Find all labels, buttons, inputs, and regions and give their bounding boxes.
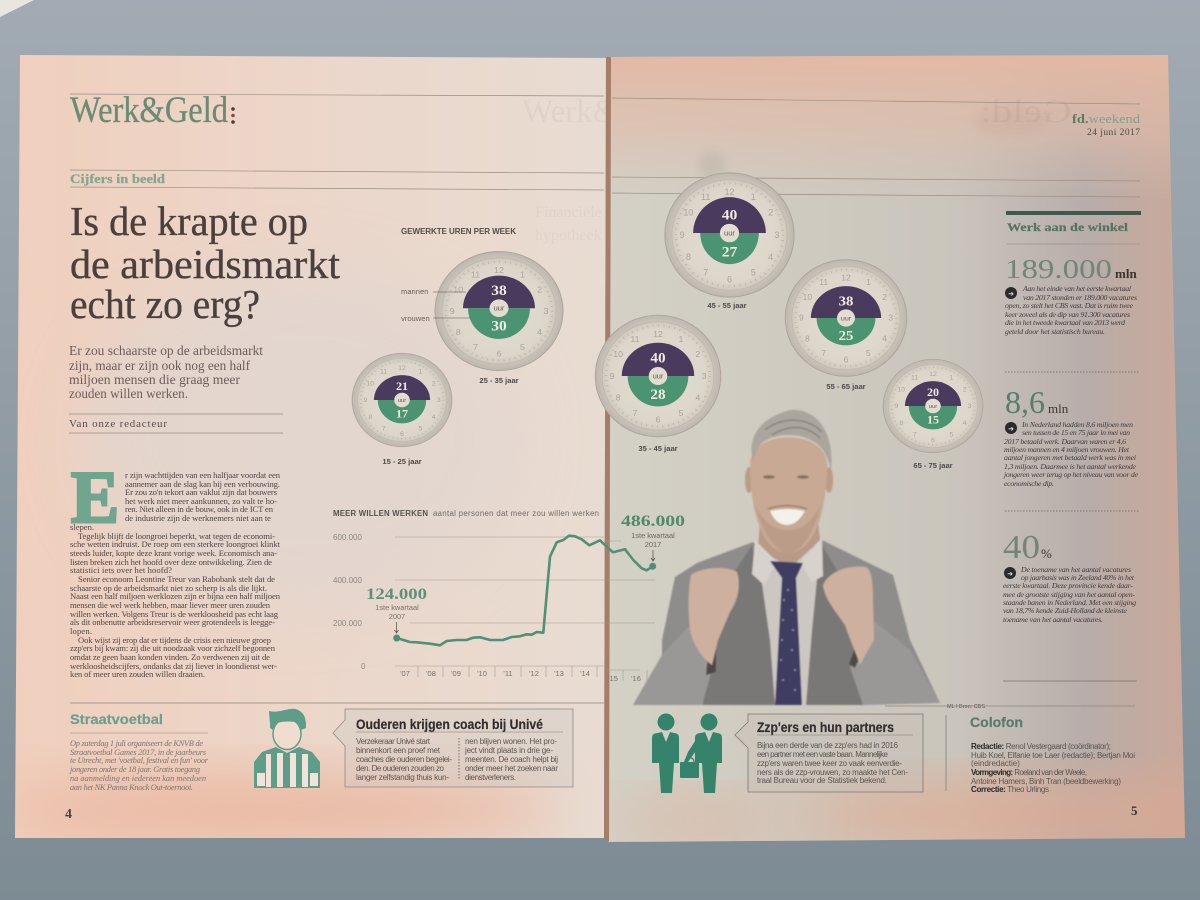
clock: 55-65 jaar: 38	[839, 294, 853, 309]
clock: 65-75 jaar: 5	[949, 432, 954, 439]
clock: 55-65 jaar: 2	[882, 292, 887, 302]
chart y-axis labels: 400.000	[333, 576, 362, 585]
clock: 15-25 jaar: 6	[400, 431, 404, 438]
section label: Cijfers in beeld	[70, 171, 166, 186]
stat text: Aan het einde van het eerste kwartaal	[1022, 284, 1131, 293]
stat: 40%: ➜	[1007, 571, 1013, 578]
clock: 45-55 jaar: 12	[724, 187, 735, 197]
panel: Straatvoetbal: Straatvoetbal Games 2017, in de jaarbeurs	[70, 748, 206, 757]
article text: de industrie zijn de werknemers niet aan te	[125, 513, 271, 523]
label: 55-65 jaar: 55 - 65 jaar	[826, 382, 866, 391]
article text: statistici iets over het hoofd?	[70, 565, 172, 575]
clock: 15-25 jaar: 5	[418, 426, 423, 433]
clock: 25-35 jaar: 2	[537, 285, 542, 294]
article text: slepen.	[70, 522, 94, 532]
panel: Colofon	[970, 715, 1135, 794]
callout box: Zzp'ers en hun partners: een partner met een vaste baan. Mannelijke	[757, 750, 889, 759]
article text: omdat ze geen baan konden vinden. Zo verdwenen zij uit de	[70, 652, 270, 662]
stat text: sen tussen de 15 en 75 jaar in mei van	[1022, 428, 1130, 437]
panel: Straatvoetbal: Op zaterdag 1 juli organiseert de KNVB de	[70, 739, 203, 748]
intro text	[69, 344, 263, 402]
chart x-axis labels: '15	[608, 674, 618, 683]
clock: 65-75 jaar: 2	[963, 387, 967, 393]
date block: 24 juni 2017	[1087, 128, 1140, 138]
clock: 15-25 jaar: 21	[396, 380, 408, 393]
clock: 65-75 jaar: 6	[931, 437, 935, 444]
clock: 45-55 jaar: 8	[686, 252, 691, 262]
callout box: Zzp'ers en hun partners: traal Bureau voor de Statistiek bekend.	[757, 776, 887, 785]
panel: Straatvoetbal: jongeren onder de 18 jaar. Gratis toegang	[69, 765, 200, 774]
chart x-axis labels	[400, 669, 660, 683]
callout box: Ouderen krijgen coach bij Univé: meenten. De coach helpt bij	[465, 755, 558, 764]
clock: 55-65 jaar	[785, 260, 907, 376]
shirt	[757, 548, 820, 705]
clock: 25-35 jaar: 8	[456, 327, 461, 337]
eyes	[763, 475, 775, 479]
clock: 55-65 jaar: 3	[888, 313, 893, 323]
chart x-axis labels: '07	[400, 669, 410, 678]
clock: 65-75 jaar: 8	[899, 420, 903, 427]
stat text: open, zo stelt het CBS vast. Dat is ruim twee	[1005, 301, 1134, 310]
clock: 25-35 jaar: 10	[453, 285, 463, 294]
label: 25-35 jaar: 25 - 35 jaar	[479, 376, 519, 385]
masthead: Werk & Geld: Werk&Geld	[70, 90, 228, 131]
chart title: aantal personen dat meer zou willen werken	[433, 509, 599, 518]
stat text: geteld door het statistisch bureau.	[1005, 327, 1105, 336]
article text: r zijn wachttijden van een halfjaar voordat een	[125, 470, 281, 480]
clock: 45-55 jaar: 40	[722, 207, 738, 223]
callout box: Zzp'ers en hun partners: Zzp'ers en hun partners	[757, 719, 894, 735]
icon: referee	[254, 709, 320, 788]
intro text: zijn, maar er zijn ook nog een half	[69, 359, 250, 374]
clock: 35-45 jaar: 2	[695, 349, 701, 359]
clock: 25-35 jaar: 38	[491, 284, 507, 299]
callout: 486.000: 2017	[645, 540, 661, 549]
paper corner top left	[0, 0, 34, 17]
chart x-axis labels: '13	[554, 669, 564, 678]
clock: 25-35 jaar: 6	[496, 349, 502, 358]
clock: 15-25 jaar: 1	[418, 369, 423, 376]
show-through ghost text: Financiële	[535, 204, 602, 221]
callout box: Ouderen krijgen coach bij Univé: onder meer het zoeken naar	[465, 764, 558, 773]
clock: 45-55 jaar: 3	[774, 230, 780, 240]
callout: 486.000: 1ste kwartaal	[631, 531, 675, 540]
chart title: MEER WILLEN WERKEN	[333, 509, 428, 518]
stat: 189.000 mln	[1005, 254, 1137, 299]
panel: Colofon: Vormgeving: Roeland van der Weele,	[971, 768, 1087, 777]
photo: smiling businessman	[633, 410, 940, 705]
suit	[633, 540, 940, 705]
article text: schaarste op de arbeidsmarkt niet zo scherp is als die lijkt.	[70, 583, 267, 593]
callout box: Zzp'ers en hun partners	[735, 714, 923, 792]
panel: Colofon: Antoine Hamers, Binh Tran (beeldbewerking)	[971, 777, 1121, 786]
panel: left newspaper page	[0, 50, 610, 845]
callout box: Ouderen krijgen coach bij Univé: Verzekeraar Univé start	[356, 737, 431, 746]
article text	[70, 470, 281, 679]
stat text	[1005, 284, 1137, 336]
chart x-axis labels: '11	[503, 669, 513, 678]
article text: Ook wijst zij erop dat er tijdens de crisis een nieuwe groep	[78, 635, 271, 645]
label: 15-25 jaar: 15 - 25 jaar	[382, 457, 422, 466]
article text: sche wetten indruist. De roep om een sterkere loongroei klinkt	[70, 539, 281, 549]
callout: 486.000	[621, 513, 685, 570]
clock: 35-45 jaar: 6	[656, 415, 661, 425]
callout box: Zzp'ers en hun partners: ners als de zzp-vrouwen, zo maakte het Cen-	[757, 768, 908, 777]
stat: 189.000 mln: 189.000	[1005, 254, 1112, 284]
clock: 55-65 jaar: uur	[841, 315, 852, 322]
clock: 15-25 jaar	[352, 353, 452, 447]
article text: zzp'ers bij kwam: zij die uit noodzaak voor zichzelf begonnen	[70, 643, 276, 653]
page number 4: 4	[65, 807, 72, 822]
clock: 65-75 jaar: 15	[927, 414, 939, 426]
clock: 35-45 jaar: 1	[679, 334, 684, 344]
clock: 15-25 jaar: 8	[368, 414, 372, 421]
chart y-axis labels: 600.000	[333, 533, 362, 542]
clock: 65-75 jaar	[883, 359, 983, 453]
clock: 45-55 jaar: 2	[768, 208, 773, 218]
panel: Colofon: (eindredactie)	[971, 759, 1020, 768]
clock: 45-55 jaar	[665, 173, 794, 297]
chart x-axis labels: '16	[631, 674, 641, 683]
article text: Senior econoom Leontine Treur van Rabobank stelt dat de	[78, 574, 275, 584]
clock: 35-45 jaar: 7	[633, 408, 638, 418]
clock: 25-35 jaar: 4	[537, 327, 542, 337]
callout: 124.000: 124.000	[366, 586, 427, 603]
collar	[752, 538, 823, 585]
stat: 40%	[1003, 529, 1052, 579]
article text: ren. Niet alleen in de bouw, ook in de ICT en	[125, 504, 274, 514]
date block	[1072, 112, 1141, 138]
stat: 8,6 mln	[1005, 384, 1069, 434]
article text: ken of meer uren zouden willen draaien.	[70, 669, 205, 679]
clock: 65-75 jaar: 20	[927, 386, 939, 399]
panel: Colofon: Huib Koel, Elfanie toe Laer (redactie); Bertjan Moi	[971, 751, 1135, 760]
stat text: keer zoveel als de dip van 91.300 vacatures	[1005, 310, 1130, 319]
title: echt zo erg?	[70, 281, 260, 327]
tie	[770, 561, 803, 705]
clock: 45-55 jaar: 1	[751, 192, 756, 202]
clock: 35-45 jaar: 28	[650, 387, 666, 403]
clock: 15-25 jaar: 2	[432, 381, 436, 387]
intro text: Er zou schaarste op de arbeidsmarkt	[69, 344, 263, 359]
panel: Straatvoetbal: Straatvoetbal	[70, 711, 163, 727]
clock: 25-35 jaar: 7	[473, 342, 478, 352]
clock: 55-65 jaar: 1	[866, 277, 871, 287]
clock: 65-75 jaar: 10	[897, 387, 905, 393]
stat text: mee de grootste stijging van het aantal open-	[1003, 590, 1135, 599]
sidebar: Werk aan de winkel	[1003, 211, 1141, 681]
clock: 25-35 jaar: 5	[520, 342, 525, 352]
left sleeve	[633, 627, 715, 705]
article text: lopen.	[70, 626, 92, 636]
show-through ghost text	[522, 100, 606, 244]
panel: Straatvoetbal: aan het NK Panna Knock Out-toernooi.	[70, 783, 193, 792]
chart y-axis labels: 200.000	[333, 619, 362, 628]
intro text: miljoen mensen die graag meer	[69, 373, 240, 388]
clock: 55-65 jaar: 5	[866, 348, 871, 358]
label: 65-75 jaar: 65 - 75 jaar	[913, 461, 953, 470]
clock: 35-45 jaar: uur	[653, 371, 664, 380]
icon: business people	[652, 714, 722, 793]
clock: 35-45 jaar: 3	[702, 371, 707, 381]
chart x-axis labels: '12	[529, 669, 539, 678]
clock: 15-25 jaar: 9	[363, 397, 368, 404]
clock: 65-75 jaar: 4	[963, 420, 967, 427]
label: 35-45 jaar: 35 - 45 jaar	[638, 444, 678, 453]
sidebar heading	[1006, 211, 1141, 234]
mouth	[770, 509, 805, 525]
callout box: Ouderen krijgen coach bij Univé: Ouderen krijgen coach bij Univé	[356, 716, 543, 732]
sleeve openings	[706, 636, 864, 675]
stat text	[1003, 420, 1139, 488]
show-through ghost text: hypotheek	[535, 227, 602, 244]
clock: 15-25 jaar: 4	[432, 414, 436, 421]
stat text: 2017 betaald werk. Daarvan waren er 4,6	[1004, 437, 1126, 446]
clock: 55-65 jaar: 9	[799, 313, 804, 323]
clock: 15-25 jaar: 12	[398, 365, 406, 372]
stat text: In Nederland hadden 8,6 miljoen men	[1021, 420, 1133, 429]
panel: right newspaper page	[605, 50, 1200, 845]
clock: 35-45 jaar: 11	[630, 334, 640, 344]
callout box: Ouderen krijgen coach bij Univé: dienstverleners.	[465, 773, 516, 782]
article text: willen werken. Volgens Treur is de werkloosheid pas echt laag	[70, 609, 279, 619]
photo credit: ML I Bron: CBS	[947, 704, 985, 710]
clock: 55-65 jaar: 25	[839, 328, 853, 344]
callout: 486.000: 486.000	[621, 513, 685, 530]
stat: 40%: 40	[1003, 529, 1040, 566]
clock: 45-55 jaar: 27	[722, 244, 738, 260]
article text: het werk niet meer aankunnen, zo valt te ho-	[125, 496, 277, 506]
stat: 189.000 mln: mln	[1115, 266, 1137, 281]
article text: steeds luider, kopte deze krant vorige week. Economisch ana-	[70, 548, 277, 558]
show-through ghost text mirrored: Geld:	[980, 94, 1072, 130]
page number 5: 5	[1131, 803, 1138, 818]
title	[70, 198, 341, 327]
clock: 55-65 jaar: 10	[803, 292, 812, 302]
callout box: Zzp'ers en hun partners: Bijna een derde van de zzp'ers had in 2016	[757, 741, 899, 750]
legend: mannen and vrouwen	[401, 287, 471, 323]
callout box: Ouderen krijgen coach bij Univé: nen blijven wonen. Het pro-	[465, 737, 557, 746]
data line	[397, 536, 653, 645]
right fist	[823, 567, 874, 665]
clock: 45-55 jaar: 5	[751, 268, 756, 278]
clock: 65-75 jaar: 3	[968, 403, 972, 410]
clock: 35-45 jaar: 9	[609, 371, 615, 381]
clock: 15-25 jaar: 10	[366, 381, 374, 387]
clock: 65-75 jaar: 12	[929, 371, 937, 378]
clock: 45-55 jaar: 6	[727, 275, 732, 284]
line chart: meer willen werken	[333, 509, 685, 683]
clock: 25-35 jaar: 9	[449, 306, 455, 316]
stat text: staande banen in Nederland. Met een stijging	[1003, 598, 1136, 607]
clock: 45-55 jaar: 9	[679, 230, 685, 240]
clock: 35-45 jaar: 4	[695, 393, 701, 403]
legend: mannen and vrouwen: mannen	[401, 287, 428, 296]
callout box: Zzp'ers en hun partners: zzp'ers waren twee keer zo vaak eenverdie-	[757, 759, 902, 768]
show-through ghost text: Werk&Geld	[522, 94, 683, 130]
clock: 45-55 jaar: 4	[768, 252, 773, 262]
article text: Naast een half miljoen werklozen zijn er bijna een half miljoen	[70, 591, 281, 601]
callout box: Ouderen krijgen coach bij Univé	[333, 709, 573, 787]
clock: 65-75 jaar: 1	[949, 375, 954, 382]
clock: 55-65 jaar: 11	[819, 277, 828, 287]
title: de arbeidsmarkt	[70, 241, 341, 287]
stat text: economische dip.	[1004, 479, 1054, 488]
clock: 65-75 jaar: 11	[911, 375, 919, 382]
neck	[758, 520, 820, 568]
intro text: zouden willen werken.	[69, 387, 188, 402]
article text: mensen die wel werk hebben, maar liever meer uren zouden	[70, 600, 271, 610]
article text: aannemer aan de slag kan bij een verbouwing.	[125, 479, 280, 489]
clock: 15-25 jaar: uur	[398, 398, 406, 404]
article text: Tegelijk blijft de loongroei beperkt, wat tegen de economi-	[78, 531, 275, 541]
clock: 15-25 jaar: 7	[382, 426, 386, 433]
legend: mannen and vrouwen: vrouwen	[401, 314, 430, 323]
stat text: miljoen mannen en 4 miljoen vrouwen. Het	[1004, 445, 1130, 454]
chart x-axis labels: '14	[580, 669, 590, 678]
stat text: van 2017 stonden er 189.000 vacatures	[1023, 293, 1137, 302]
clock: 65-75 jaar: 9	[894, 403, 899, 410]
panel: Straatvoetbal	[69, 711, 209, 792]
label: 45-55 jaar: 45 - 55 jaar	[707, 301, 747, 310]
clock: 25-35 jaar	[435, 251, 563, 371]
clock: 55-65 jaar: 4	[882, 334, 887, 344]
title: Is de krapte op	[70, 198, 308, 244]
callout: 124.000	[366, 586, 427, 642]
callout box: Ouderen krijgen coach bij Univé: langer zelfstandig thuis kun-	[356, 773, 449, 782]
article text: listen breken zich het hoofd over deze ontwikkeling. Zien de	[70, 557, 272, 567]
clock: 25-35 jaar: 30	[491, 319, 507, 334]
callout box: Ouderen krijgen coach bij Univé: coaches die ouderen begelei-	[356, 755, 452, 764]
panel: Colofon: Colofon	[970, 715, 1023, 730]
clock: 25-35 jaar: 12	[494, 265, 504, 275]
clock: 45-55 jaar: 11	[701, 192, 711, 202]
chart axis ticks	[418, 666, 647, 681]
clock: 35-45 jaar: 12	[653, 329, 663, 339]
stat text: van 18,7% kende Zuid-Holland de kleinste	[1003, 606, 1128, 615]
sidebar heading: Werk aan de winkel	[1007, 220, 1129, 234]
panel: Straatvoetbal: te Utrecht, met 'voetbal, festival en fun' voor	[70, 756, 209, 765]
clock: 35-45 jaar	[595, 315, 721, 437]
clock: 15-25 jaar: 17	[396, 408, 408, 420]
stat: 40%: %	[1041, 546, 1052, 561]
stat text: De toename van het aantal vacatures	[1020, 565, 1131, 574]
article text: Er zou zo'n tekort aan vaklui zijn dat bouwers	[125, 487, 278, 497]
clock: 45-55 jaar: 7	[703, 268, 708, 278]
clock: 15-25 jaar: 3	[437, 397, 441, 404]
right sleeve	[850, 620, 940, 705]
callout box: Ouderen krijgen coach bij Univé: ject vindt plaats in drie ge-	[464, 746, 553, 755]
callout: 124.000: 1ste kwartaal	[375, 603, 419, 612]
clock: 15-25 jaar: 11	[380, 369, 388, 376]
page fold	[604, 57, 611, 842]
article text: werkloosheidscijfers, ondanks dat zij liever in loondienst wer-	[70, 661, 277, 671]
stat: 8,6 mln: ➜	[1008, 426, 1014, 433]
clock: 25-35 jaar: uur	[494, 304, 505, 312]
clock: 55-65 jaar: 6	[844, 355, 849, 365]
stat: 189.000 mln: ➜	[1008, 291, 1014, 298]
stat: 8,6 mln: 8,6	[1005, 384, 1045, 420]
stat text: 1,3 miljoen. Daarmee is het aantal werkende	[1004, 462, 1137, 471]
chart x-axis labels: '10	[477, 669, 487, 678]
masthead rules	[70, 94, 1140, 197]
article text: als dit onbenutte arbeidsreservoir weer grotendeels is leegge-	[70, 617, 275, 627]
stat text	[1003, 565, 1136, 624]
chart title	[333, 509, 599, 518]
clock: 55-65 jaar: 8	[805, 334, 810, 344]
clock: 35-45 jaar: 40	[650, 351, 666, 367]
chart gridlines	[395, 537, 655, 670]
drop cap E: E	[71, 457, 119, 539]
clock: 25-35 jaar: 1	[520, 270, 525, 279]
stat: 8,6 mln: mln	[1048, 401, 1069, 416]
callout box: Ouderen krijgen coach bij Univé: den. De ouderen zouden zo	[356, 764, 445, 773]
stat text: toename van het aantal vacatures.	[1003, 615, 1103, 624]
clocks heading: GEWERKTE UREN PER WEEK	[401, 227, 516, 236]
byline: Van onze redacteur	[69, 418, 167, 430]
stat text: aantal jongeren met betaald werk was in mei	[1004, 453, 1136, 462]
date block: fd.weekend	[1072, 112, 1141, 126]
chart x-axis labels: '09	[451, 669, 461, 678]
stat text: die in het tweede kwartaal van 2013 werd	[1005, 318, 1125, 327]
panel: Colofon: Correctie: Theo Urlings	[971, 785, 1049, 794]
callout box: Ouderen krijgen coach bij Univé: binnenkort een proef met	[356, 746, 441, 755]
stat text: jongeren weer terug op het niveau van voor de	[1003, 470, 1139, 479]
clock: 35-45 jaar: 5	[679, 408, 684, 418]
clock: 35-45 jaar: 8	[616, 393, 621, 403]
panel: Colofon: Redactie: Renol Vestergaard (coördinator);	[971, 742, 1111, 751]
chart x-axis labels: '08	[426, 669, 436, 678]
hair	[752, 410, 832, 470]
clock: 65-75 jaar: uur	[929, 404, 937, 410]
left fist	[689, 568, 739, 665]
bottom section rules	[70, 703, 1135, 706]
callout: 124.000: 2007	[389, 612, 405, 621]
chart y-axis labels	[333, 533, 366, 671]
stat text: eerste kwartaal. Deze provincie kende daar-	[1003, 581, 1133, 590]
clock: 45-55 jaar: 10	[683, 208, 693, 218]
clock: 65-75 jaar: 7	[913, 432, 917, 439]
chart y-axis labels: 0	[361, 662, 366, 671]
clock: 25-35 jaar: 11	[471, 270, 480, 279]
stat text: op jaarbasis was in Zeeland 40% in het	[1021, 573, 1135, 582]
head	[745, 410, 833, 553]
clock: 55-65 jaar: 12	[841, 273, 851, 283]
clock: 35-45 jaar: 10	[613, 349, 623, 359]
chart x-axis labels: '17	[650, 674, 660, 683]
clock: 45-55 jaar: uur	[724, 229, 735, 237]
panel: Straatvoetbal: na aanmelding en iedereen kan meedoen	[70, 774, 206, 783]
clock: 55-65 jaar: 7	[821, 348, 826, 358]
clock: 25-35 jaar: 3	[543, 306, 549, 316]
